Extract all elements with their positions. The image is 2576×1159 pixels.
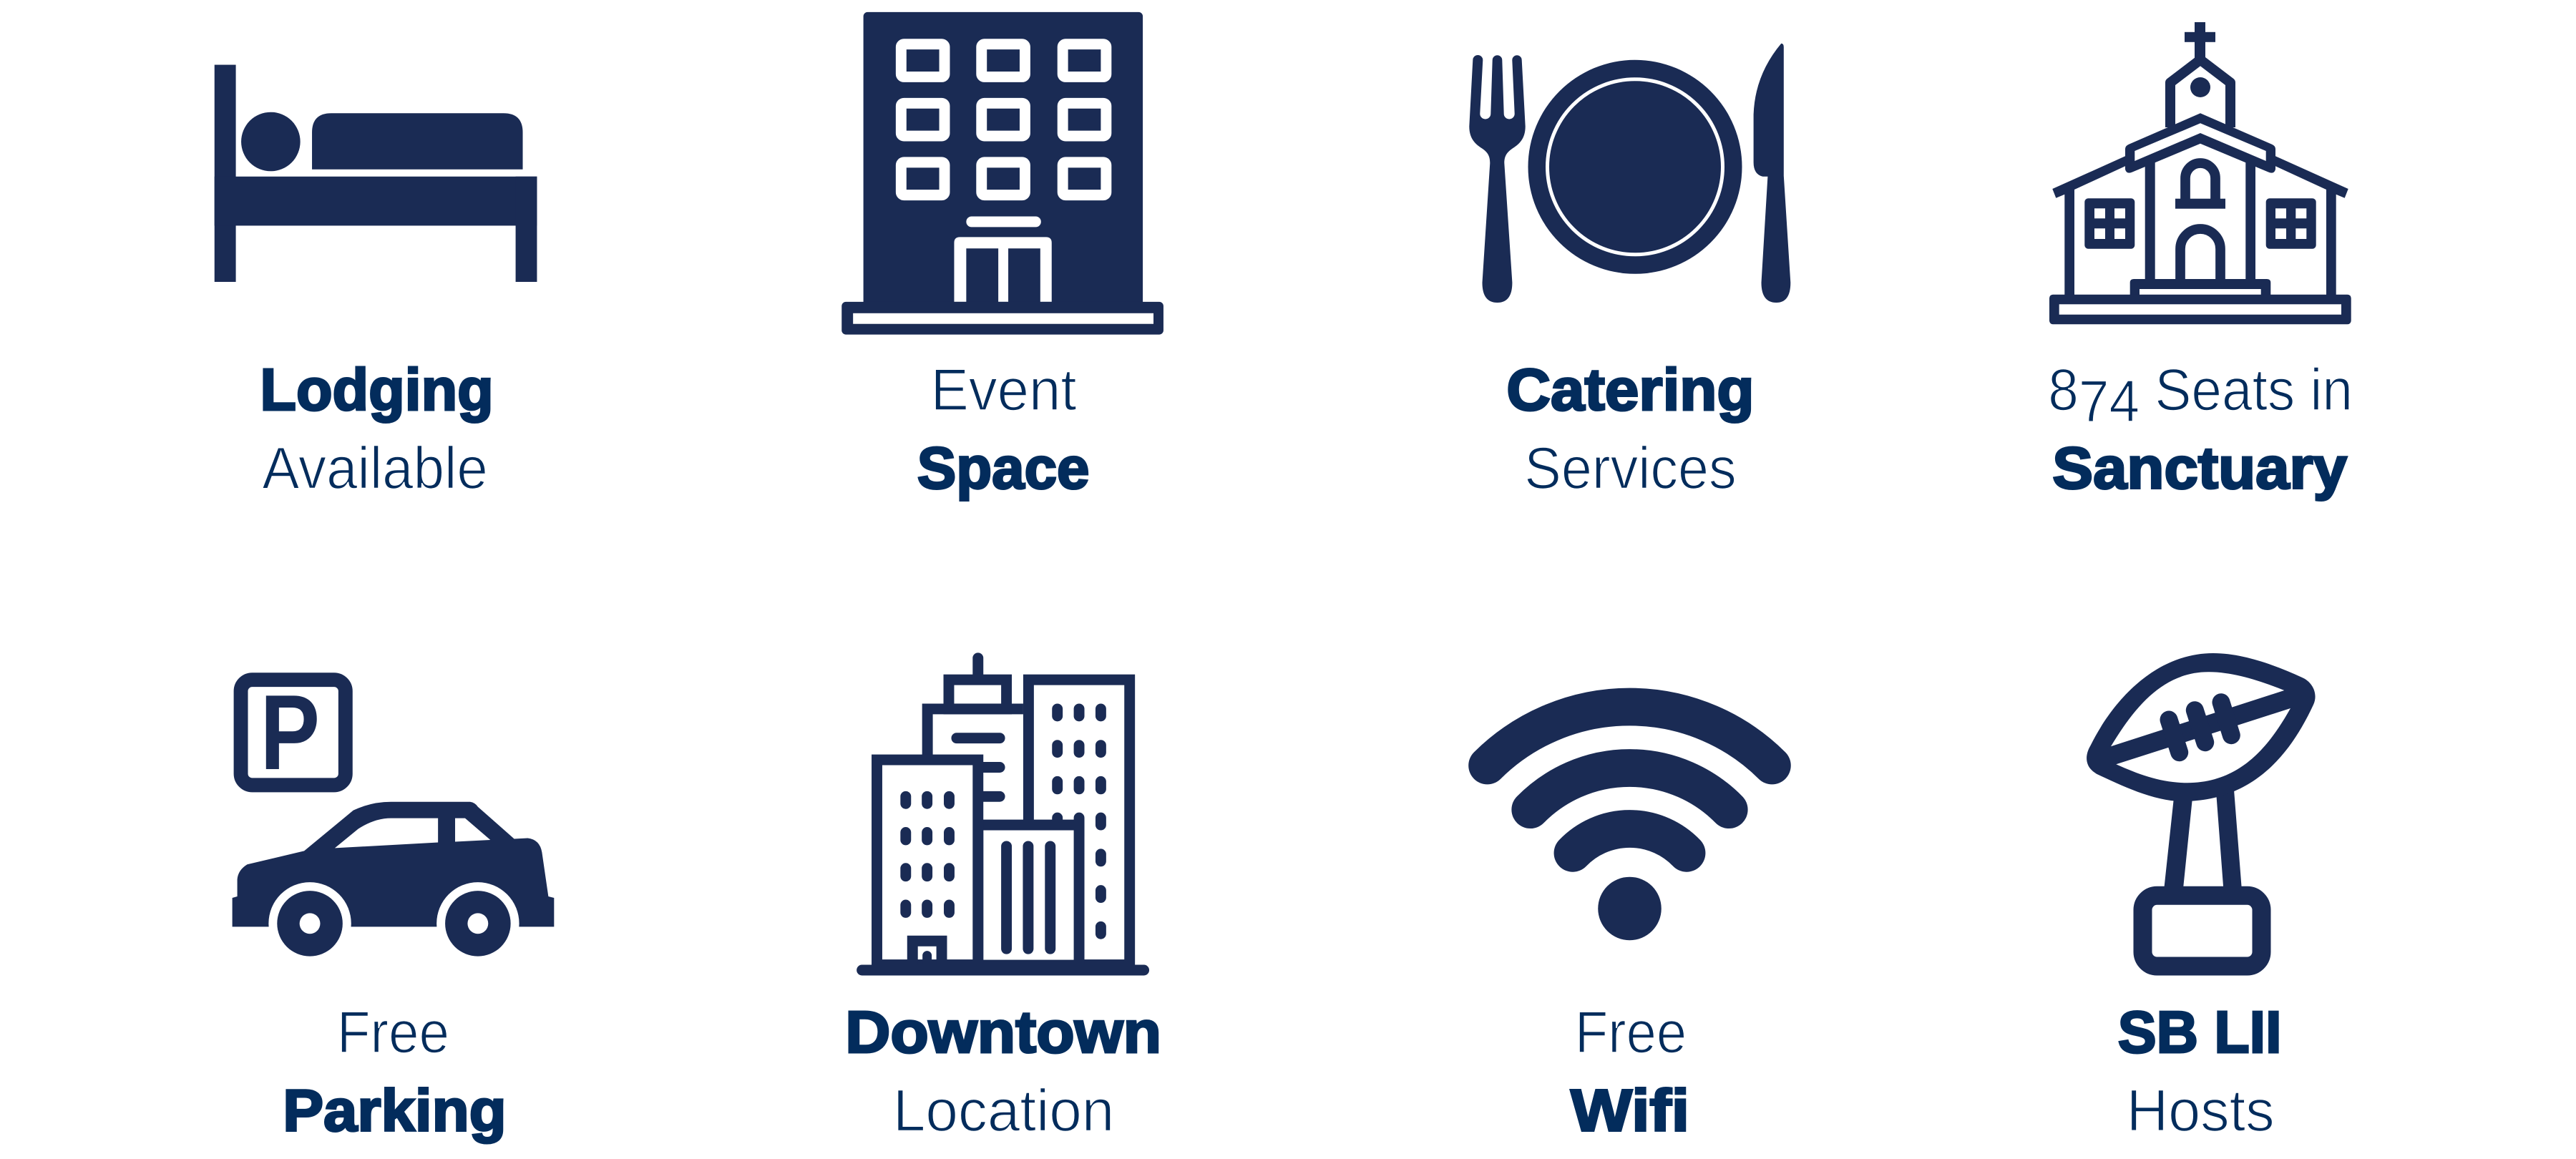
panel: wifi [1488, 707, 1772, 1143]
panel: lodging [215, 65, 537, 502]
label: Lodging Available: Lodging [260, 357, 494, 423]
label: Free Parking [283, 999, 507, 1143]
label: SB LII Hosts [2118, 999, 2282, 1143]
label: Catering Services [1506, 357, 1755, 502]
label: Free Wifi [1571, 999, 1689, 1143]
label: Downtown Location: Downtown [845, 999, 1161, 1065]
icon: bed [215, 65, 537, 282]
label: 874 Seats in Sanctuary [2048, 357, 2353, 502]
label: 874 Seats in Sanctuary: 74 [2079, 368, 2140, 434]
panel: parking [229, 673, 563, 1143]
panel: sanctuary [2048, 22, 2353, 502]
panel: catering [1469, 44, 1790, 502]
icon: hotel building [841, 12, 1163, 335]
icon: parking sign and car: P [260, 673, 320, 792]
label: Lodging Available: Available [262, 436, 488, 502]
label: Catering Services: Catering [1506, 357, 1755, 423]
label: Downtown Location: Location [893, 1077, 1114, 1143]
icon: fork, plate and knife [1469, 44, 1790, 303]
icon: football trophy [2087, 653, 2316, 966]
label: Free Wifi: Wifi [1571, 1077, 1689, 1143]
label: Lodging Available [260, 357, 494, 502]
label: Event Space: Space [917, 436, 1089, 502]
panel: super bowl hosts [2087, 653, 2316, 1143]
label: SB LII Hosts: Hosts [2127, 1077, 2275, 1143]
label: Free Parking: Free [337, 999, 449, 1065]
icon: wifi signal [1488, 707, 1772, 940]
label: Free Wifi: Free [1575, 999, 1687, 1065]
label: Free Parking: Parking [283, 1077, 507, 1143]
label: Event Space [917, 357, 1089, 502]
panel: downtown [845, 658, 1161, 1143]
label: SB LII Hosts: SB LII [2118, 999, 2282, 1065]
icon: church [2049, 22, 2351, 324]
label: Catering Services: Services [1524, 436, 1737, 502]
label: 874 Seats in Sanctuary: Sanctuary [2052, 436, 2347, 502]
icon: city skyline [862, 658, 1144, 970]
panel: event space [841, 12, 1163, 502]
icon: parking sign and car [229, 673, 563, 965]
label: Event Space: Event [931, 357, 1077, 423]
label: Downtown Location [845, 999, 1161, 1143]
label: 874 Seats in Sanctuary: Seats in [2140, 357, 2353, 423]
label: 874 Seats in Sanctuary: 8 [2048, 357, 2081, 423]
